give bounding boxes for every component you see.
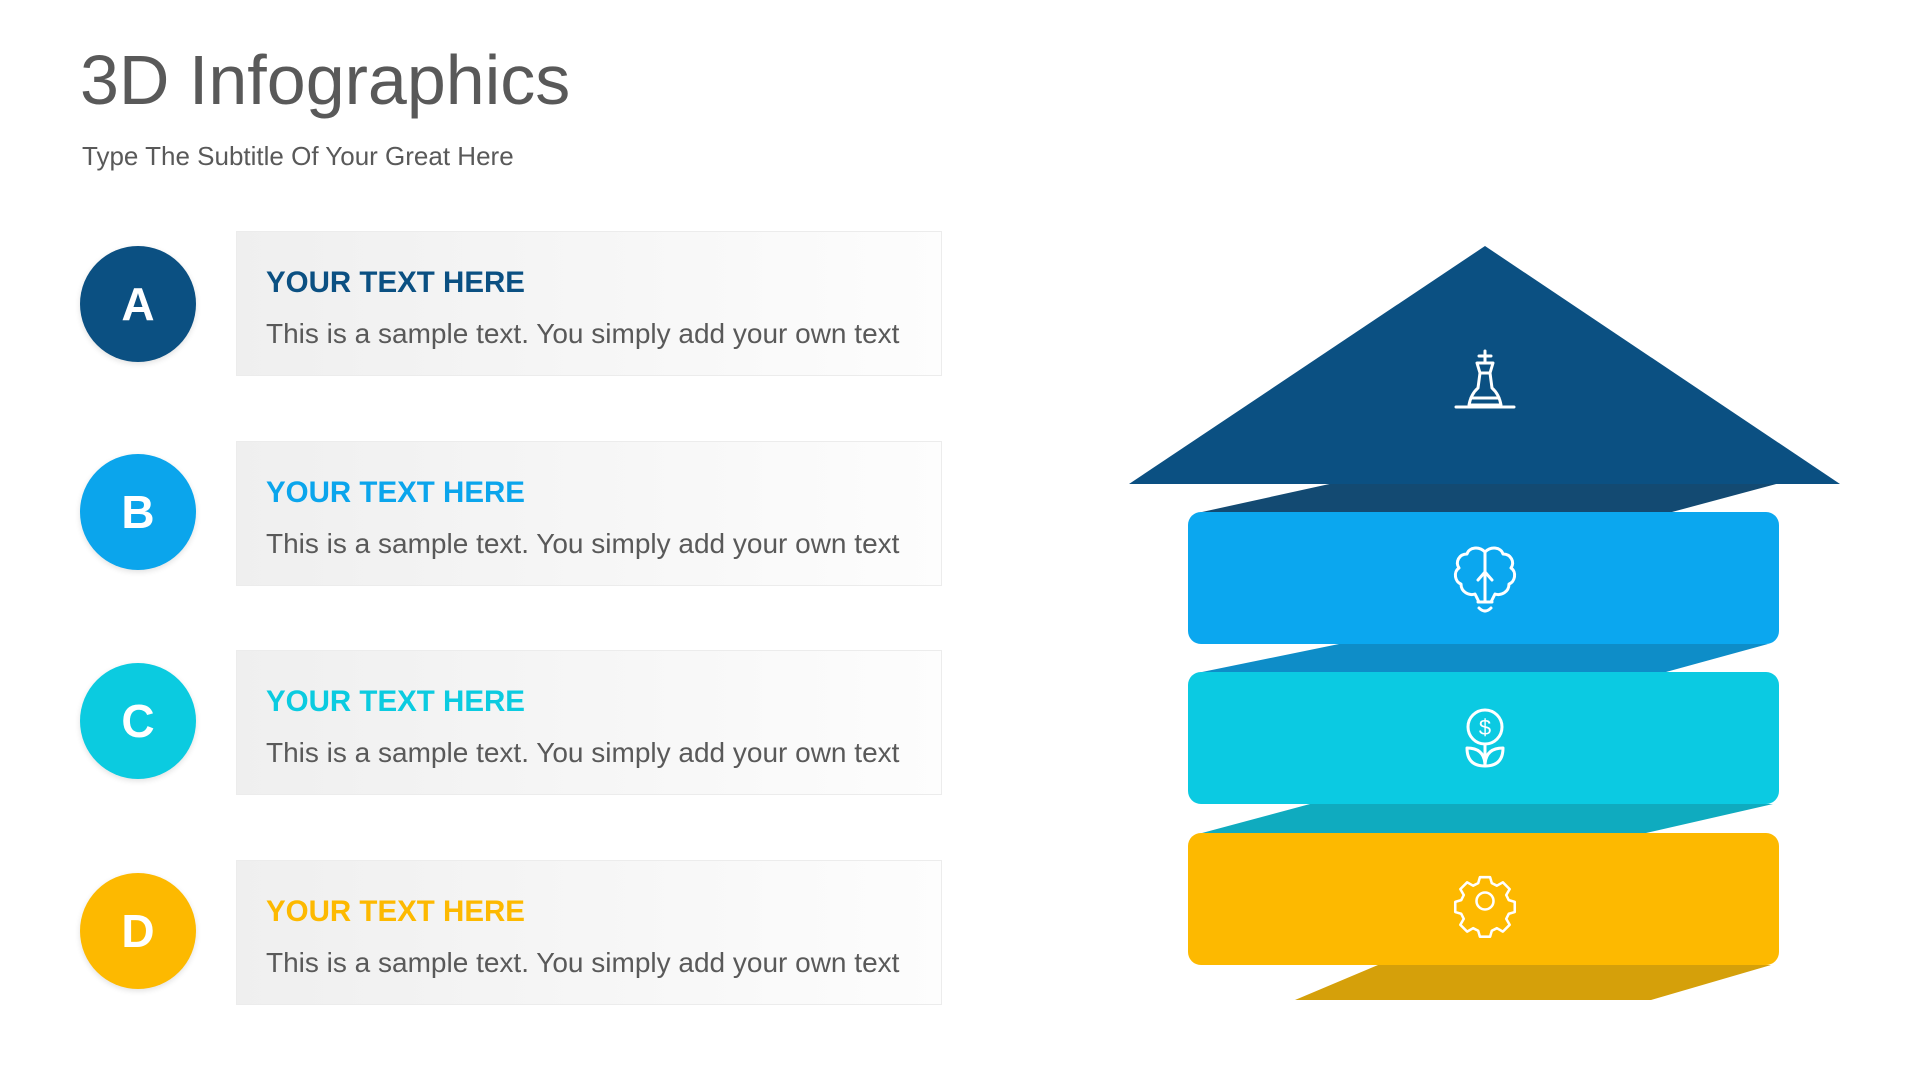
circle A: A [121,278,155,330]
icon: gear [1455,877,1515,937]
card D: YOUR TEXT HERE [266,895,525,928]
icon: chess king [1456,351,1514,407]
card C [236,650,942,795]
triangle top [1129,246,1840,484]
icon: money plant: $ [1479,715,1491,740]
circle C: C [121,695,155,747]
circle B [80,454,196,570]
subtitle: Type The Subtitle Of Your Great Here [82,141,514,171]
card C: This is a sample text. You simply add your own text [266,737,899,768]
card C: YOUR TEXT HERE [266,685,525,718]
card B: This is a sample text. You simply add your own text [266,528,899,559]
card A [236,231,942,376]
card D: This is a sample text. You simply add your own text [266,947,899,978]
circle C [80,663,196,779]
circle D [80,873,196,989]
card D [236,860,942,1005]
circle B: B [121,486,155,538]
connectors [1202,483,1780,1000]
card B: YOUR TEXT HERE [266,476,525,509]
circle D: D [121,905,155,957]
icon: money plant [1467,710,1503,766]
icon: brain bulb [1455,548,1515,611]
circle A [80,246,196,362]
layer boxes [1188,512,1779,965]
title: 3D Infographics [80,41,570,119]
card A: This is a sample text. You simply add your own text [266,318,899,349]
card A: YOUR TEXT HERE [266,266,525,299]
card B [236,441,942,586]
